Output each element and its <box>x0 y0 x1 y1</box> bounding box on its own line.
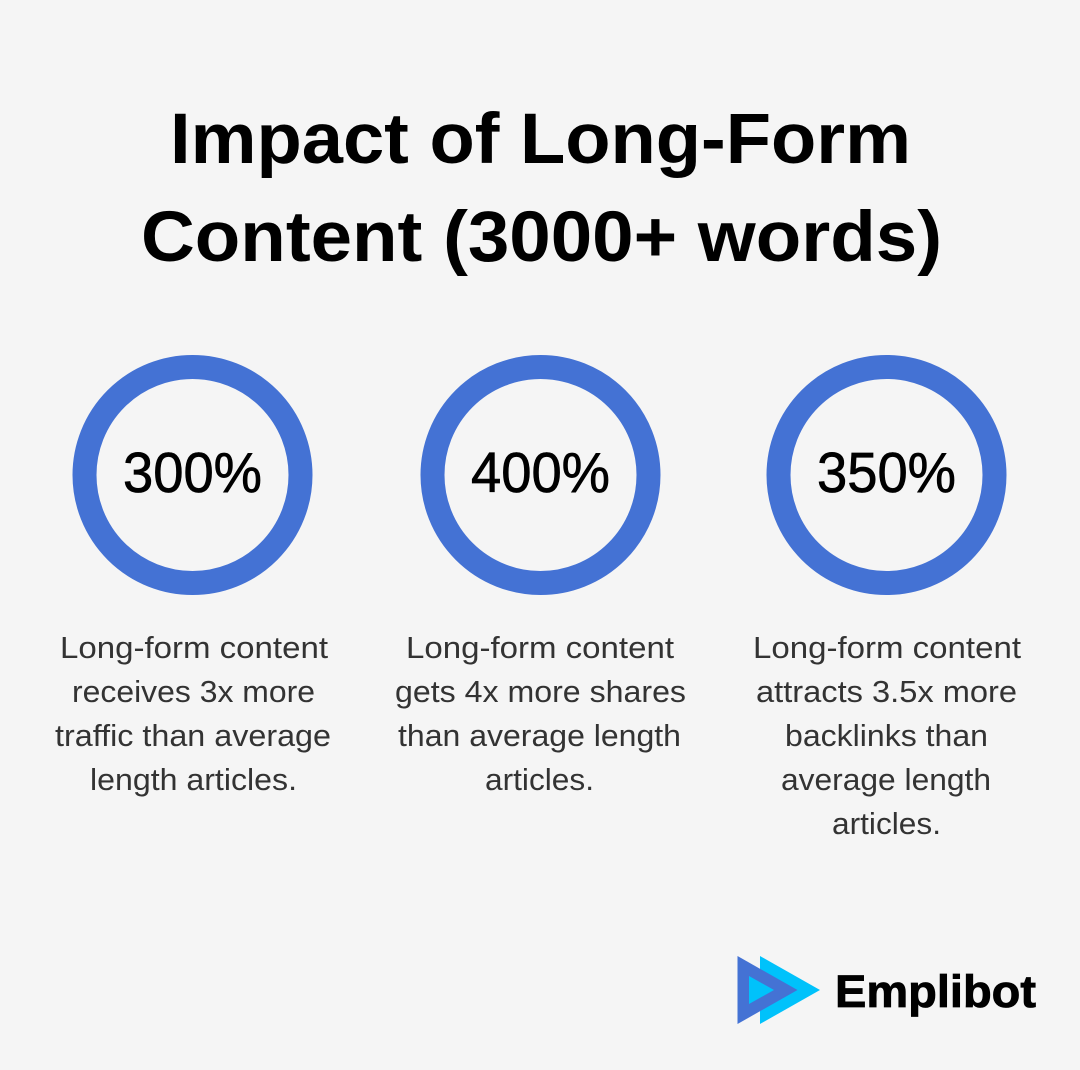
description: shares <box>395 630 686 797</box>
wordmark: Emplibot <box>835 966 1036 1017</box>
description: traffic: Long-form content <box>60 630 328 665</box>
title: Impact of Long-Form <box>170 100 911 179</box>
icon: play triangles <box>738 956 820 1024</box>
panel: traffic statistic <box>55 367 331 797</box>
value: 400%: 400% <box>471 441 610 505</box>
value: 350%: 350% <box>817 441 956 505</box>
description: backlinks: attracts 3.5x more <box>756 674 1017 709</box>
title: Content (3000+ words) <box>141 198 942 277</box>
description: traffic: receives 3x more <box>72 674 315 709</box>
description: backlinks: backlinks than <box>785 718 988 753</box>
title <box>141 100 942 277</box>
description: backlinks: Long-form content <box>753 630 1021 665</box>
panel: shares statistic <box>395 367 686 797</box>
ring: 350% <box>778 367 994 583</box>
ring: 300% <box>84 367 300 583</box>
description: shares: Long-form content <box>406 630 674 665</box>
description: backlinks <box>753 630 1021 841</box>
ring: 400% <box>432 367 648 583</box>
logo: Emplibot <box>738 956 1036 1024</box>
value: 300%: 300% <box>123 441 262 505</box>
description: traffic: length articles. <box>90 762 297 797</box>
description: backlinks: articles. <box>832 806 941 841</box>
description: traffic: traffic than average <box>55 718 331 753</box>
description: traffic <box>55 630 331 797</box>
description: shares: articles. <box>485 762 594 797</box>
description: shares: than average length <box>398 718 681 753</box>
description: backlinks: average length <box>781 762 991 797</box>
panel: backlinks statistic <box>753 367 1021 841</box>
description: shares: gets 4x more shares <box>395 674 686 709</box>
